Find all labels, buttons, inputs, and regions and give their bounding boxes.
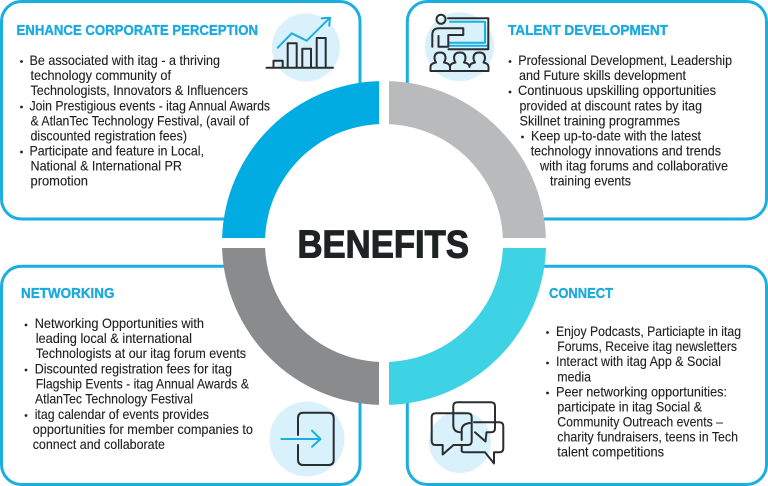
bullet list — [509, 53, 732, 188]
bullet list: Join Prestigious events - itag Annual Awards — [30, 98, 270, 114]
bullet list: with itag forums and collaborative — [539, 158, 728, 174]
heading: NETWORKING — [21, 286, 114, 302]
bullet list: Technologists, Innovators & Influencers — [30, 83, 248, 98]
bullet list: Professional Development, Leadership — [518, 53, 732, 68]
bullet list: Participate and feature in Local, — [30, 144, 204, 158]
bullet list: Networking Opportunities with — [35, 316, 204, 331]
bullet list: Discounted registration fees for itag — [35, 362, 232, 376]
bullet list — [20, 53, 270, 188]
bullet list: Enjoy Podcasts, Particiapte in itag — [556, 324, 741, 339]
icon: bar chart with rising arrow — [266, 14, 340, 82]
bullet list: talent competitions — [557, 444, 664, 460]
panel: networking — [2, 266, 360, 484]
bullet list: leading local & international — [36, 331, 192, 346]
bullet list: National & International PR — [30, 158, 182, 174]
heading: CONNECT — [549, 286, 613, 302]
bullet list: & AtlanTec Technology Festival, (avail of — [30, 114, 249, 128]
bullet list: Flagship Events - itag Annual Awards & — [36, 376, 249, 392]
ring segment: light gray — [389, 81, 546, 238]
bullet list: Keep up-to-date with the latest — [531, 128, 701, 144]
bullet list: Be associated with itag - a thriving — [30, 53, 220, 68]
bullet list: Community Outreach events – — [557, 414, 723, 430]
title: BENEFITS — [298, 223, 469, 266]
bullet list: Peer networking opportunities: — [556, 384, 727, 400]
bullet list: connect and collaborate — [33, 437, 165, 452]
bullet list: discounted registration fees) — [30, 128, 187, 144]
bullet list: Technologists at our itag forum events — [36, 346, 246, 361]
bullet list: promotion — [30, 174, 88, 188]
bullet list: itag calendar of events provides — [35, 407, 209, 422]
bullet list: Interact with itag App & Social — [556, 354, 721, 369]
bullet list: Forums, Receive itag newsletters — [557, 339, 737, 354]
ring: benefits — [222, 81, 546, 405]
bullet list: technology community of — [30, 68, 171, 83]
ring segment: dark gray — [222, 248, 379, 405]
bullet list: technology innovations and trends — [531, 144, 721, 158]
bullet list — [546, 324, 741, 460]
icon: enter arrow — [270, 402, 344, 476]
bullet list: opportunities for member companies to — [33, 422, 253, 437]
icon: presenter and audience — [425, 12, 494, 81]
panel outline — [2, 266, 360, 484]
icon: speech bubbles — [429, 402, 503, 473]
bullet list: media — [557, 370, 591, 384]
bullet list: and Future skills development — [519, 68, 686, 83]
panel: talent development — [407, 2, 766, 219]
bullet list: charity fundraisers, teens in Tech — [557, 430, 738, 444]
bullet list: participate in itag Social & — [557, 400, 702, 414]
bullet list: provided at discount rates by itag — [520, 98, 702, 114]
panel outline — [2, 2, 360, 219]
panel: connect — [407, 266, 766, 484]
panel: enhance corporate perception — [2, 2, 360, 219]
bullet list: Continuous upskilling opportunities — [518, 83, 716, 98]
bullet list: training events — [550, 174, 631, 188]
bullet list: AtlanTec Technology Festival — [35, 392, 193, 406]
heading: ENHANCE CORPORATE PERCEPTION — [16, 23, 258, 39]
panel outline — [407, 2, 766, 219]
ring segment: teal — [389, 248, 546, 405]
heading: TALENT DEVELOPMENT — [508, 23, 668, 39]
bullet list — [25, 316, 253, 452]
panel outline — [407, 266, 766, 484]
bullet list: Skillnet training programmes — [520, 114, 680, 128]
ring segment: blue — [222, 81, 379, 238]
